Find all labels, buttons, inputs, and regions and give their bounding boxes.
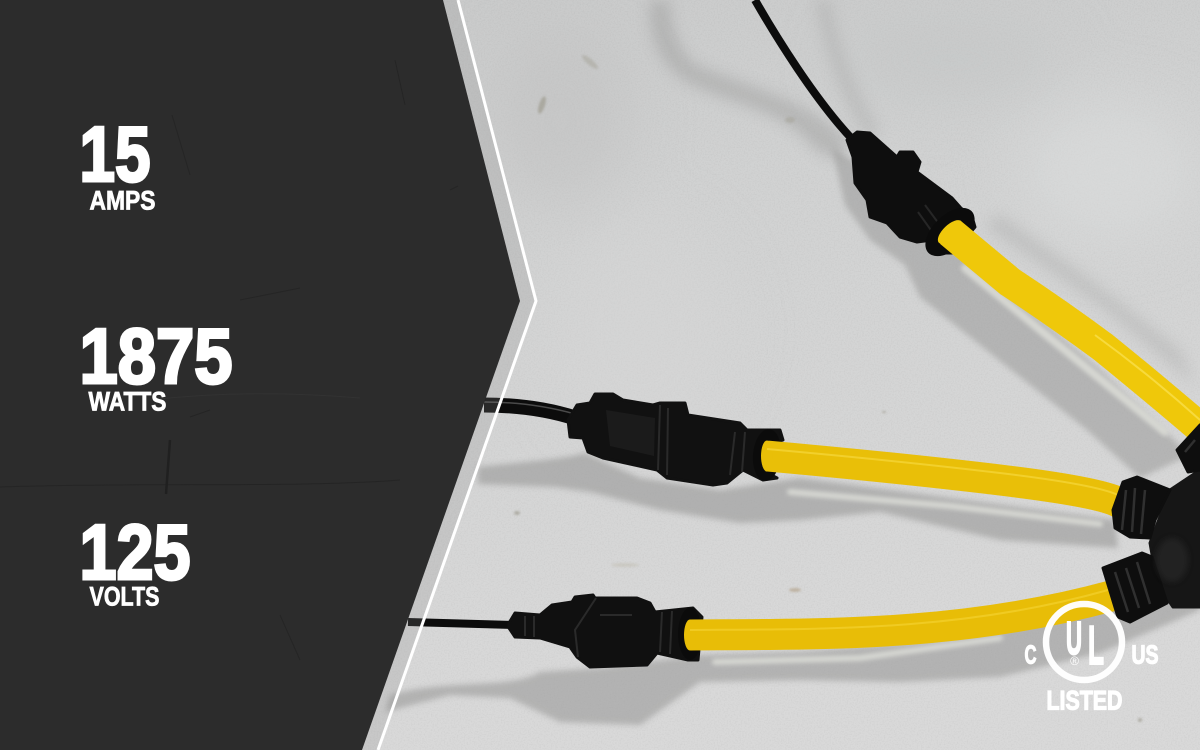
top cord	[755, 0, 853, 140]
LISTED label: LISTED	[1046, 686, 1122, 716]
UL ring	[1046, 604, 1122, 680]
value: 15	[80, 110, 150, 198]
registered mark: ®	[1070, 654, 1079, 668]
plug connector: bottom	[509, 595, 702, 667]
value: 1875	[80, 312, 232, 400]
mottled floor tones	[490, 20, 1200, 440]
UL listed certification mark: U	[1066, 612, 1082, 664]
bottom yellow cord	[690, 596, 1111, 635]
middle cord	[484, 405, 575, 418]
stat: 1875 watts	[80, 312, 232, 416]
stat: 125 volts	[80, 508, 190, 612]
bottom cord	[408, 622, 512, 625]
collar	[751, 428, 783, 482]
unit: WATTS	[88, 386, 166, 416]
white chevron outline	[378, 0, 536, 750]
collar	[678, 608, 702, 660]
collar	[917, 199, 983, 265]
translucent strip beside the panel	[362, 0, 536, 750]
cast shadows on the floor	[385, 0, 1200, 725]
plug connector: middle	[568, 394, 783, 485]
dark chevron panel	[0, 0, 520, 750]
UL listed certification mark: L	[1088, 614, 1104, 676]
stat: 15 amps	[80, 110, 156, 216]
C mark: C	[1024, 640, 1037, 670]
splitter hub with strain reliefs	[1103, 425, 1200, 622]
floor stains	[514, 53, 1142, 722]
middle yellow cord	[767, 456, 1120, 503]
top yellow cord	[950, 232, 1200, 432]
panel scratches	[165, 440, 171, 494]
US mark: US	[1132, 640, 1158, 670]
black cords	[408, 0, 853, 625]
unit: VOLTS	[90, 582, 160, 612]
UL listed certification mark	[1024, 604, 1158, 716]
value: 125	[80, 508, 190, 596]
yellow cord sections	[684, 216, 1200, 650]
light reflections beside cords	[715, 268, 1165, 662]
plug connector: top	[847, 132, 983, 265]
unit: AMPS	[90, 186, 156, 216]
